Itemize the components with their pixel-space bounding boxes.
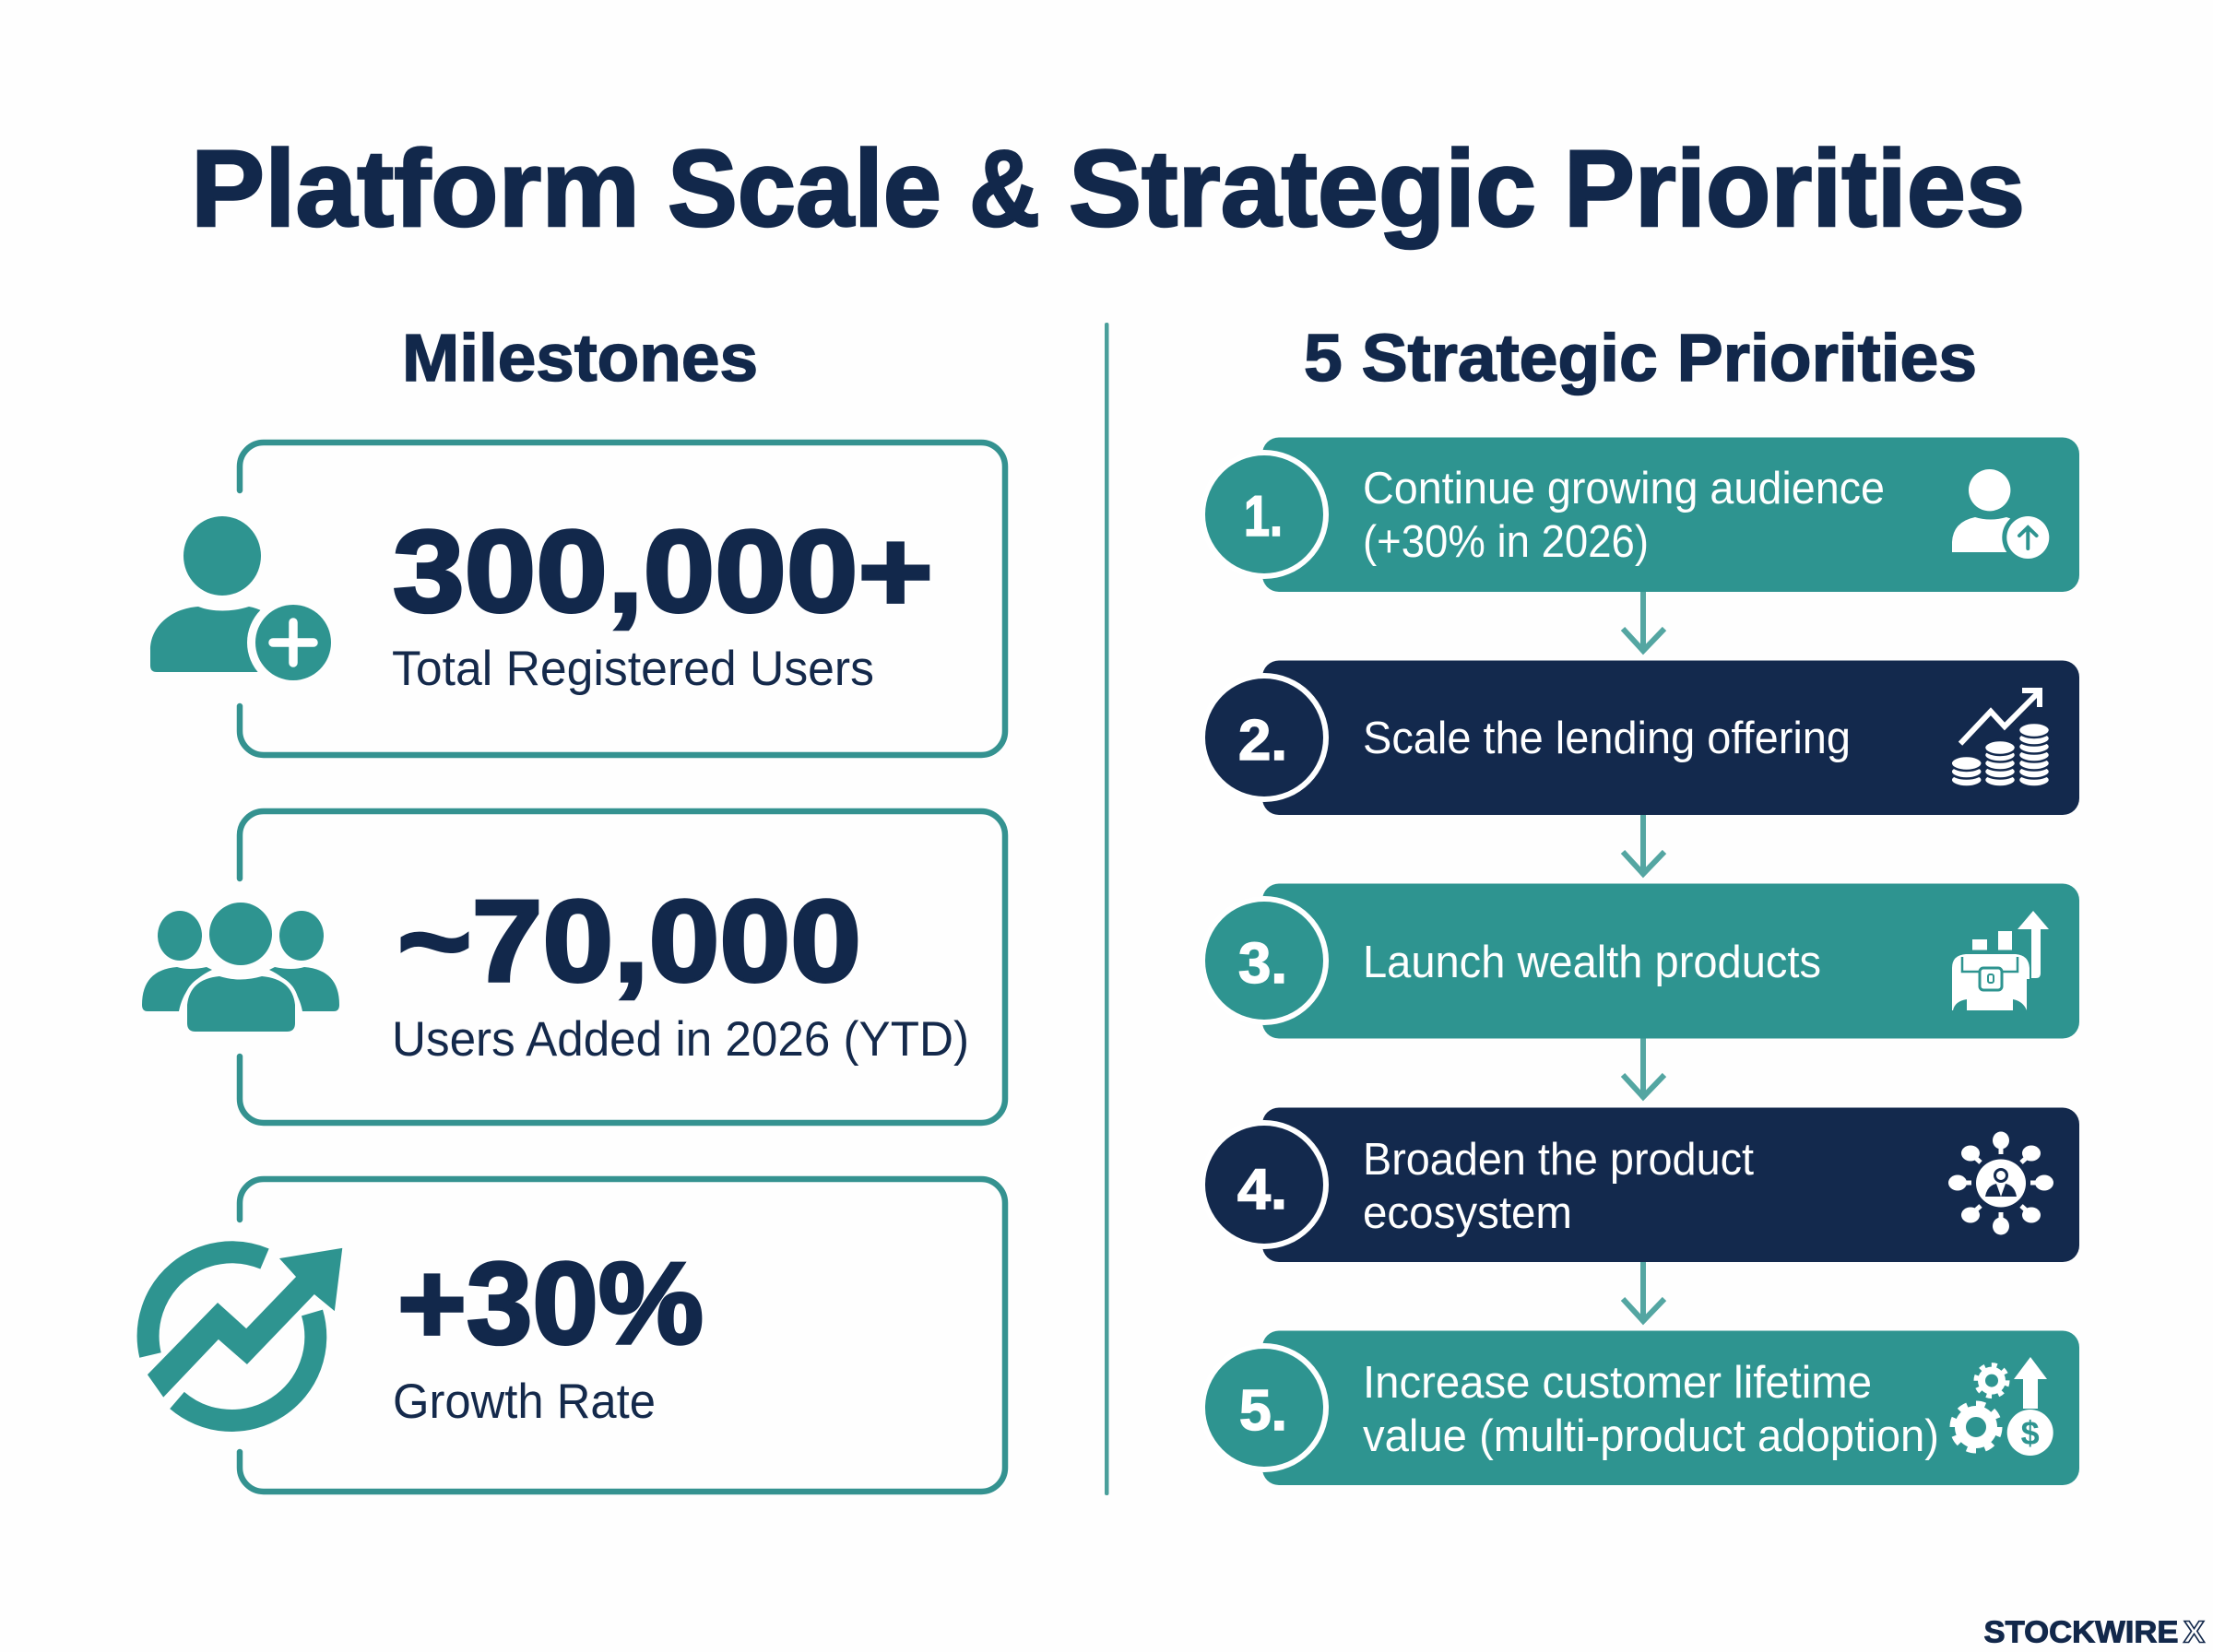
title: Scale [668, 128, 941, 250]
text: Launch wealth products [1363, 938, 1821, 987]
panel: users added [142, 811, 1005, 1123]
heading: milestones: Milestones [402, 322, 758, 395]
heading: 5 strategic priorities: 5 Strategic Priorities [1304, 322, 1977, 395]
panel: growth rate [146, 1179, 1005, 1492]
stat value: +30% [397, 1238, 704, 1368]
stat value: 300,000+ [393, 506, 933, 636]
card outline [240, 811, 1005, 1123]
card outline [240, 1179, 1005, 1492]
icon: growth arrow in circle [146, 1246, 344, 1421]
title: Platform [191, 128, 640, 250]
title [191, 128, 2025, 250]
text: Scale the lending offering [1363, 714, 1851, 763]
priority 5 [1200, 1331, 2079, 1485]
title: & [969, 128, 1040, 250]
priority 2 [1200, 660, 2079, 815]
stat label: Growth Rate [393, 1375, 656, 1429]
priority 1 [1200, 437, 2079, 592]
icon: user up [1952, 469, 2053, 563]
text: ecosystem [1363, 1188, 1572, 1238]
icon: coins and growth line [1951, 690, 2050, 787]
icon: ecosystem network [1948, 1132, 2053, 1235]
arrow 2 to 3 [1623, 815, 1664, 874]
text: value (multi-product adoption) [1363, 1411, 1939, 1461]
arrow 1 to 2 [1623, 592, 1664, 651]
number: 3. [1238, 932, 1287, 996]
icon: gears with dollar and arrow [1953, 1357, 2053, 1456]
text: (+30% in 2026) [1363, 517, 1649, 567]
icon: user with plus [150, 516, 339, 689]
arrow 3 to 4 [1623, 1038, 1664, 1097]
stat label: Total Registered Users [392, 642, 874, 696]
icon: user group [142, 903, 339, 1032]
stat value: ~70,000 [397, 876, 861, 1006]
priority 4 [1200, 1108, 2079, 1262]
text: Increase customer lifetime [1363, 1358, 1872, 1408]
text [1363, 1135, 1754, 1238]
number: 2. [1238, 709, 1287, 773]
title: Priorities [1564, 128, 2025, 250]
title: Strategic [1069, 128, 1536, 250]
stat label: Users Added in 2026 (YTD) [392, 1012, 969, 1067]
icon: gears with dollar and arrow: $ [2021, 1414, 2040, 1452]
text: Continue growing audience [1363, 464, 1885, 513]
number: 1. [1244, 485, 1283, 549]
text [1363, 464, 1885, 567]
text [1363, 1358, 1939, 1461]
number: 4. [1237, 1158, 1287, 1221]
logo: stockwire x: STOCKWIRE [1984, 1615, 2178, 1648]
arrow 4 to 5 [1623, 1262, 1664, 1321]
icon: treasure chest with arrow [1952, 911, 2049, 1010]
panel: total registered users [150, 442, 1005, 755]
card outline [240, 442, 1005, 755]
logo: stockwire x: X [2183, 1615, 2205, 1648]
priority 3 [1200, 883, 2079, 1038]
number: 5. [1239, 1379, 1287, 1443]
text: Broaden the product [1363, 1135, 1754, 1185]
